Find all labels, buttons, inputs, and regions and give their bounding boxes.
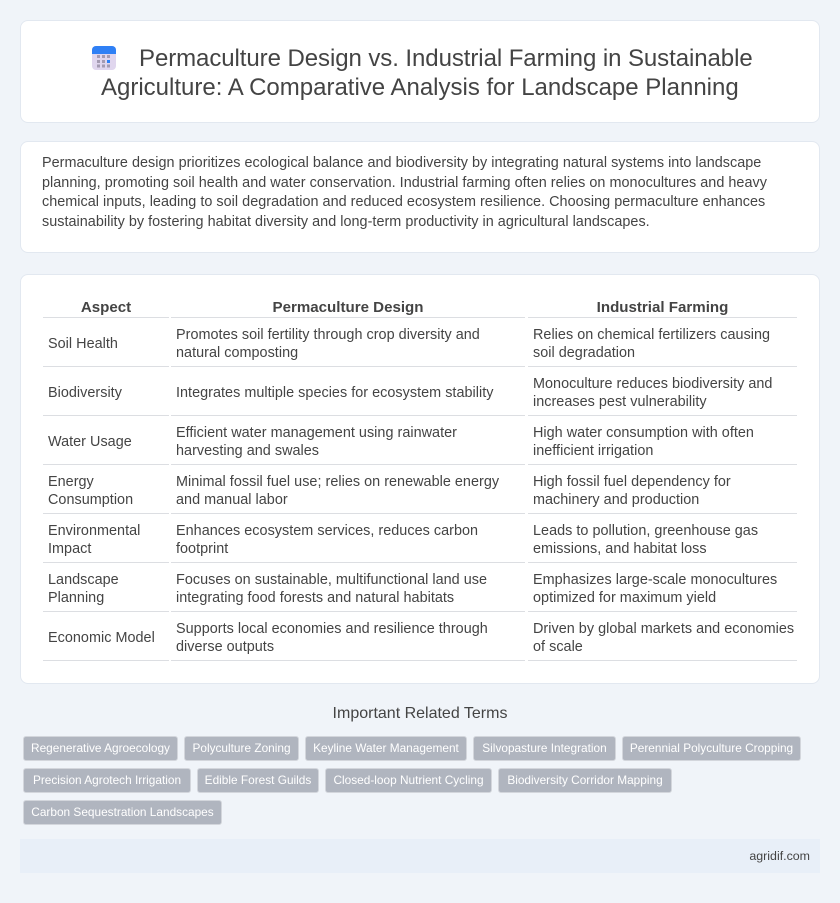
text block: introduction: Permaculture design prioritizes ecological balance and biodiversity by integrating natural systems into landscape (42, 155, 761, 171)
row: energy consumption: Energy (48, 474, 94, 490)
row: soil health: Relies on chemical fertilizers causing (533, 327, 770, 343)
panel: comparison table (20, 274, 820, 684)
row: economic model: Supports local economies and resilience through (176, 621, 488, 637)
footer source text: agridif.com (749, 849, 810, 863)
row: energy consumption: Consumption (48, 492, 133, 508)
tag (305, 736, 467, 761)
text block: introduction (42, 155, 767, 230)
row: soil health: Soil Health (48, 336, 118, 352)
row: biodiversity: Monoculture reduces biodiversity and (533, 376, 772, 392)
row: energy consumption: and manual labor (176, 492, 288, 508)
icon: calendar (92, 46, 116, 70)
row: soil health (48, 327, 770, 361)
row: environmental impact: Environmental (48, 523, 140, 539)
row: landscape planning: Landscape (48, 572, 119, 588)
row: energy consumption: Minimal fossil fuel use; relies on renewable energy (176, 474, 499, 490)
tag: Polyculture Zoning (192, 741, 291, 755)
row: economic model: Driven by global markets and economies (533, 621, 794, 637)
tag: Regenerative Agroecology (31, 741, 170, 755)
heading: important related terms: Important Related Terms (333, 705, 507, 722)
row: environmental impact: Enhances ecosystem services, reduces carbon (176, 523, 478, 539)
tag (622, 736, 801, 761)
panel: related term tags (23, 736, 801, 825)
tag (197, 768, 319, 793)
tag (498, 768, 672, 793)
tag: Keyline Water Management (313, 741, 459, 755)
row: environmental impact: footprint (176, 541, 228, 557)
row: water usage: inefficient irrigation (533, 443, 653, 459)
row: landscape planning: Emphasizes large-scale monocultures (533, 572, 777, 588)
panel: title header (20, 20, 820, 123)
tag (184, 736, 299, 761)
row: landscape planning: Focuses on sustainable, multifunctional land use (176, 572, 487, 588)
row: environmental impact: Impact (48, 541, 91, 557)
tag (325, 768, 492, 793)
row: economic model: Economic Model (48, 630, 155, 646)
text block: introduction: planning, promoting soil health and water conservation. Industrial farming often relies on monocultures and heavy (42, 174, 767, 190)
title: Permaculture Design vs. Industrial Farming in Sustainable (139, 45, 753, 72)
panel: introduction (20, 141, 820, 253)
title: Agriculture: A Comparative Analysis for Landscape Planning (101, 74, 739, 101)
table header: Industrial Farming (597, 299, 728, 316)
row: economic model (48, 621, 794, 655)
row: energy consumption: machinery and production (533, 492, 699, 508)
row: landscape planning: optimized for maximum yield (533, 590, 716, 606)
row: water usage: High water consumption with often (533, 425, 754, 441)
tag: Edible Forest Guilds (205, 773, 311, 787)
tag: Carbon Sequestration Landscapes (31, 805, 214, 819)
row: soil health: natural composting (176, 345, 298, 361)
row: energy consumption (48, 474, 731, 508)
row: water usage: Water Usage (48, 434, 132, 450)
row: biodiversity: Biodiversity (48, 385, 122, 401)
row: water usage: harvesting and swales (176, 443, 319, 459)
tag (23, 736, 178, 761)
tag: Closed-loop Nutrient Cycling (333, 773, 484, 787)
row: biodiversity: Integrates multiple species for ecosystem stability (176, 385, 493, 401)
row: soil health: soil degradation (533, 345, 635, 361)
row: landscape planning: integrating food forests and natural habitats (176, 590, 454, 606)
title (101, 45, 753, 101)
tag (473, 736, 616, 761)
row: economic model: of scale (533, 639, 583, 655)
row: water usage: Efficient water management using rainwater (176, 425, 457, 441)
footer bar (20, 839, 820, 873)
table header: Aspect (81, 299, 131, 316)
row: environmental impact (48, 523, 758, 557)
row: water usage (48, 425, 754, 459)
table header (81, 299, 728, 316)
tag: Perennial Polyculture Cropping (630, 741, 793, 755)
row: environmental impact: Leads to pollution, greenhouse gas (533, 523, 758, 539)
row: economic model: diverse outputs (176, 639, 274, 655)
row: landscape planning (48, 572, 777, 606)
tag: Biodiversity Corridor Mapping (507, 773, 663, 787)
row: environmental impact: emissions, and habitat loss (533, 541, 707, 557)
row: soil health: Promotes soil fertility through crop diversity and (176, 327, 480, 343)
row: energy consumption: High fossil fuel dependency for (533, 474, 731, 490)
text block: introduction: chemical inputs, leading to soil degradation and reduced ecosystem resilience. Choosing permaculture enhances (42, 194, 765, 210)
tag (23, 800, 222, 825)
text block: introduction: sustainability by fostering habitat diversity and long-term productivity in agricultural landscapes. (42, 214, 650, 230)
tag (23, 768, 191, 793)
table header: Permaculture Design (272, 299, 424, 316)
tag: Precision Agrotech Irrigation (33, 773, 181, 787)
row: biodiversity: increases pest vulnerability (533, 394, 707, 410)
tag: Silvopasture Integration (482, 741, 607, 755)
row: landscape planning: Planning (48, 590, 104, 606)
row: biodiversity (48, 376, 772, 410)
